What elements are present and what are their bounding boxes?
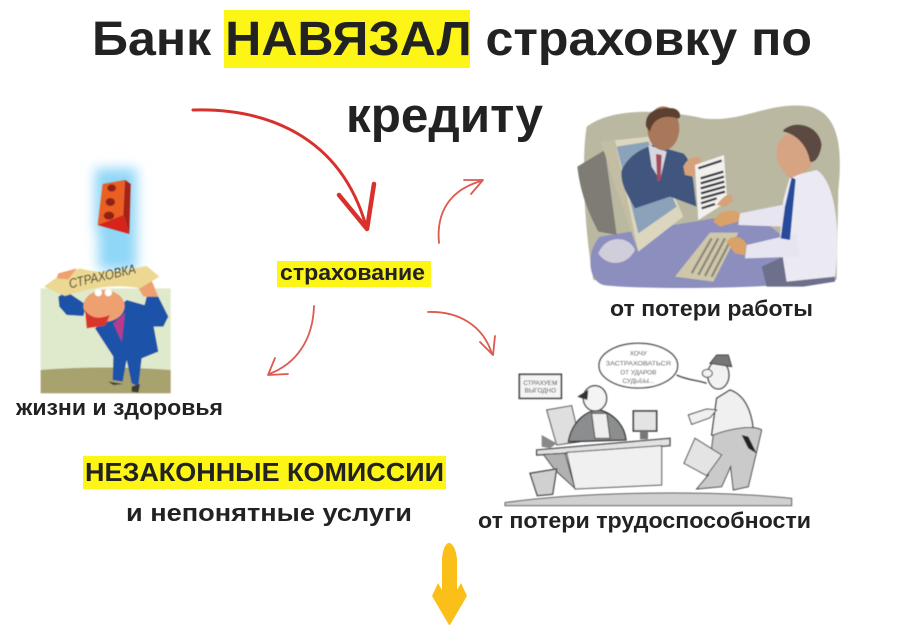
wall sign: СТРАХУЕМ [523,380,557,387]
desk [537,435,670,489]
label: life and health: жизни и здоровья [15,395,223,420]
speech bubble: ЗАСТРАХОВАТЬСЯ [606,361,671,368]
arrow: to life and health [268,306,314,375]
desk [590,218,833,288]
speech bubble: ОТ УДАРОВ [620,369,656,376]
keyboard [675,233,738,282]
ground panel [41,288,171,393]
computer [633,411,657,439]
speech bubble: СУДЬБЫ... [623,378,654,385]
blue glow [95,168,137,270]
wall sign: ВЫГОДНО [525,387,556,394]
title [92,10,812,143]
arrow: to disability [428,312,495,355]
man at desk [713,125,837,287]
banner [44,261,159,296]
document [695,155,733,220]
callout: illegal fees: НЕЗАКОННЫЕ КОМИССИИ [85,457,444,487]
banner: СТРАХОВКА [67,261,137,291]
arrow: yellow down [432,543,467,625]
callout: illegal fees: и непонятные услуги [126,500,412,527]
wall sign [519,374,561,398]
speech bubble: ХОЧУ [630,351,648,358]
label: job loss: от потери работы [610,296,813,321]
arrow: large red curved arrow to insurance [193,110,374,229]
speech bubble [599,343,707,388]
trash bin [530,469,557,496]
title: кредиту [346,89,543,143]
illustration: man asks insurance clerk at desk [505,343,792,506]
man [58,277,168,393]
arrow: to job loss [439,180,483,243]
illustration: man hands document out of a monitor [577,105,840,288]
monitor [577,137,683,263]
title: Банк НАВЯЗАЛ страховку по [92,13,812,66]
floor [505,493,792,506]
label: disability: от потери трудоспособности [478,508,811,533]
man in monitor [621,106,702,208]
clerk [547,386,626,445]
illustration: falling brick over man with insurance banner [41,168,171,393]
visitor [684,355,762,490]
callout: illegal fees [83,456,446,527]
wall background [584,105,840,280]
brick [98,180,131,234]
label: insurance: страхование [280,260,425,285]
